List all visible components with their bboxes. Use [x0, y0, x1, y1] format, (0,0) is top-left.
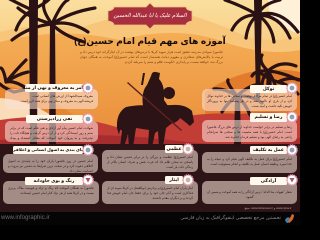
panel: color of sacrifice: عاشورا به همگان آموخت که رنگ و نژاد و قومیت ملاک برتری نیست و در کربلا همه از هر نژاد کنار امام حسین ایستادند.	[8, 186, 94, 195]
panel: amr be maruf: معروف سیدالشهدا از ارزش های انسانی است.	[32, 94, 93, 98]
panel: duty	[202, 144, 298, 173]
header	[25, 84, 83, 92]
banner: salutation	[108, 3, 192, 29]
panel: azemat	[102, 143, 198, 172]
header	[250, 177, 287, 185]
icon	[286, 111, 298, 123]
icon	[286, 144, 298, 156]
header: آزادگی	[261, 178, 276, 183]
panel: ethics: امام حسین در روز عاشورا یاران خود را به پایبندی به اصول اخلاقی دعوت کرد و در سخت ترین شرایط به دشمن نیز مروت و انسانیت نشان داد.	[8, 159, 93, 173]
header	[13, 146, 83, 154]
panel: amr be maruf	[5, 82, 98, 109]
banner: salutation: السلام علیک یا ابا عبدالله الحسین	[113, 13, 187, 19]
panel: azadegi	[202, 174, 298, 204]
site url: www.infographic.ir	[1, 215, 50, 221]
panel: tavakkol	[202, 82, 298, 111]
header: عمل به تکلیف	[253, 147, 284, 152]
icon	[82, 113, 94, 125]
icon	[182, 174, 194, 186]
panel: azemat: امام حسین(ع) عظمت و بزرگی را در برابر دشمن نشان داد و پاسخی به سخن ظلم داد که عزت نفس و شرف انسان بالاتر از زندگی ذلت بار است.	[107, 155, 193, 169]
sources line: منبع: www.farsnews.ir و www.ipna.ir	[245, 206, 291, 210]
header	[26, 115, 83, 123]
panel: nafye zolm	[5, 113, 98, 142]
icon	[82, 82, 94, 94]
panel: color of sacrifice	[3, 174, 99, 204]
header: عظمی	[166, 146, 182, 151]
panel: reza va taslim: رضا و تسلیم در برابر خواست خداوند از درس های بزرگ عاشورا است. امام حسین(ع) با همه مصیبت ها و سختی ها سرانجام راضی به رضای الهی بود و تسلیم فرمان خداوند شد.	[207, 125, 292, 139]
panel: amr be maruf: فریضه الهی به معروف و منکر نهی برای همه لازم است.	[20, 99, 93, 103]
palm trees	[0, 0, 300, 146]
header	[250, 85, 287, 93]
footer bar	[0, 212, 300, 225]
header: پای بندی به اصول انسانی و اخلاقی	[13, 147, 83, 152]
icon	[286, 174, 298, 186]
header	[165, 145, 183, 153]
header: توکل	[263, 86, 274, 91]
header: رضا و تسلیم	[255, 114, 282, 119]
panel: reza va taslim	[202, 111, 298, 142]
footer tagline: نخستین مرجع تخصصی اینفوگرافیک به زبان فارسی	[180, 216, 281, 221]
intro paragraph: عاشورا سوادی مدرسه عشق است هزار شهید کربلا با درس‌های نهضت در آن ایثارگرانه خود درس داد و تربیت با پالایش‌های شعائری و مفهوم دیانت همه‌ساز است که امام حسین(ع) آموخت به همگان جهان بزرگ شد خواهند نیست بر پایداری حکومت ظلم و ستم را سربلند کردن.	[80, 50, 223, 64]
header	[165, 176, 183, 184]
icon	[82, 174, 94, 186]
title: آموزه های مهم قیام امام حسین(ع)	[74, 36, 226, 46]
panel: duty: امام حسین(ع) برای عمل به تکلیف الهی قیام کرد و نتیجه را به خدا سپرد. وظیفه انسان عمل به تکلیف و انجام مسئولیت است.	[207, 157, 292, 166]
panel: isar	[102, 174, 198, 204]
logo	[285, 214, 294, 223]
icon	[82, 144, 94, 156]
header: رنگ و بوی جاودانه	[34, 178, 74, 183]
header: نفی زرادپرستی	[37, 116, 72, 121]
horse and rider silhouette	[117, 72, 194, 147]
panel: ethics	[3, 144, 98, 173]
header	[250, 146, 287, 154]
panel: azadegi: شعار "هیهات منا الذله" درس آزادگی را به همه آموخت و مسیر آن گشود.	[207, 190, 292, 199]
panel: isar: ایثار یاران امام حسین(ع) و برادرش ابوالفضل در کربلا نمونه ای از فداکاری است و آنان جان خود را برای حفظ جان امام خویش فدا کردند و بر دیگران مقدم داشتند.	[107, 186, 193, 200]
panel: tavakkol: امام حسین(ع) در تمام مراحل نهضت و سختی ها بر خداوند توکل کرد و از یاری او ناامید نشد و در هر پیشامد تنها به پروردگار خویش تکیه داشت و امید بست.	[207, 94, 292, 108]
header	[25, 177, 83, 185]
icon	[182, 143, 194, 155]
header: ایثار	[169, 177, 179, 182]
icon	[286, 82, 298, 94]
header	[250, 113, 287, 122]
